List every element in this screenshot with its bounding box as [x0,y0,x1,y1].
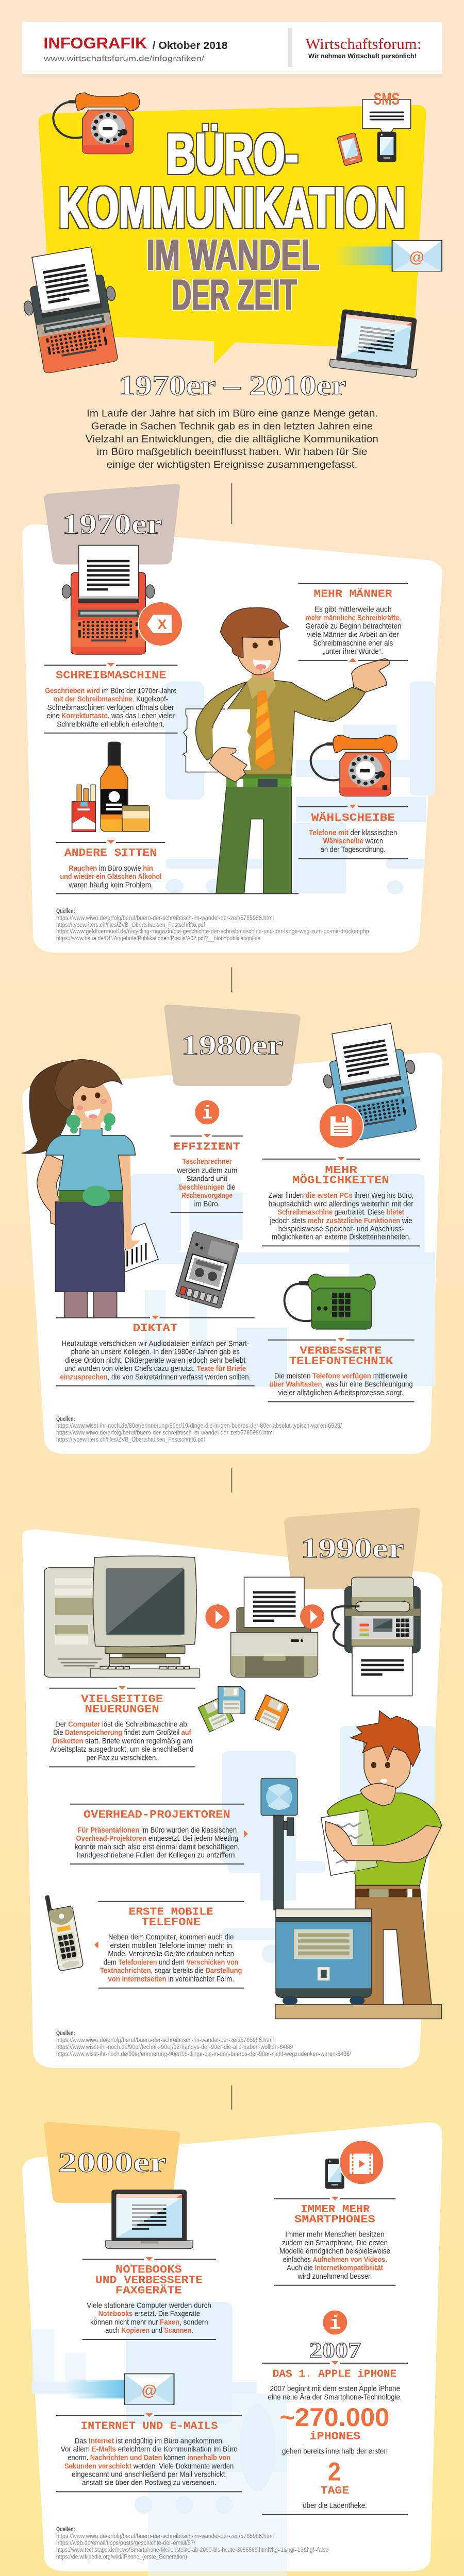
callout: mehr möglichkeiten: Schreibmaschine gearbeitet. Diese bietet [277,1209,404,1217]
tag: 1980er: 1980er [181,1029,283,1061]
icon: smartphone with video badge [325,2140,384,2189]
callout: apple iphone 2007: ~270.000 [279,2403,389,2432]
callout: effizient: im Büro. [194,1200,220,1209]
icon: fax machine [332,1577,420,1696]
callout: wählscheibe: Wählscheibe waren [323,837,383,845]
icon: email [67,2374,174,2404]
callout: mehr möglichkeiten: beispielsweise Speicher- und Anschluss- [278,1225,404,1233]
icon: info: i [202,1103,213,1124]
platform [275,2005,441,2019]
sources 1980er: https://typewriters.ch/files/ZVB_Obertshausen_Festschrift6.pdf [56,1437,205,1443]
callout: verbesserte telefontechnik: über Wahltasten, was für eine Beschleunigung [269,1381,413,1389]
callout: schreibmaschine: SCHREIBMASCHINE [56,670,167,682]
tag: 1970er: 1970er [62,508,162,540]
intro text: Vielzahl an Entwicklungen, die die alltägliche Kommunikation [86,434,378,445]
callout: internet und e-mails: Das Internet ist endgültig im Büro angekommen. [75,2437,224,2445]
callout: vielseitige neuerungen: Die Datenspeicherung findet zum Großteil auf [53,1728,191,1737]
callout: vielseitige neuerungen: VIELSEITIGE [81,1694,163,1705]
intro text [86,409,378,470]
callout: verbesserte telefontechnik: TELEFONTECHNIK [289,1356,393,1368]
callout: erste mobile telefone: dem Telefonieren und dem Verschicken von [104,1959,239,1967]
callout: wählscheibe: an der Tagesordnung. [321,846,386,854]
logo wordmark: Wirtschaftsforum: [305,36,421,53]
callout: overhead-projektoren: handgeschriebene Folien der Kollegen zu entziffern. [77,1852,237,1860]
sources 1990er: https://www.wisst-ihr-noch.de/90er/erinnerung-90er/16-dinge-die-in-den-bueros-der-90er-nicht-wegzudenken-waren-6436/ [56,2051,351,2057]
subtitle years: 1970er – 2010er [119,370,346,401]
callout: overhead-projektoren [70,1804,248,1864]
panel: 1980er [22,1005,442,1454]
intro text: Gerade in Sachen Technik gab es in den letzten Jahren eine [91,421,373,432]
sources 1970er [56,908,369,942]
callout: internet und e-mails: INTERNET UND E-MAILS [81,2420,218,2432]
sources 2000er: https://web.de/email/tipps/posts/geschichte-der-email/87/ [56,2540,196,2547]
callout: schreibmaschine: Geschrieben wird im Büro der 1970er-Jahre [45,687,177,695]
callout: notebooks [82,2257,216,2340]
character: man with papers [183,607,389,893]
callout: vielseitige neuerungen: NEUERUNGEN [85,1704,159,1716]
panel: 1990er [22,1507,442,2068]
intro text: Im Laufe der Jahre hat sich im Büro eine ganze Menge getan. [87,409,378,419]
callout: erste mobile telefone: ERSTE MOBILE [129,1907,213,1919]
callout: schreibmaschine: eine Korrekturtaste, was das Leben vieler [47,712,175,720]
callout: notebooks: Viele stationäre Computer werden durch [87,2301,211,2310]
callout: immer mehr smartphones: zudem ein Smartphone. Die ersten [282,2239,388,2247]
callout: overhead-projektoren: Overhead-Projektoren eingesetzt. Bei jedem Meeting [76,1835,238,1843]
sources 1980er [56,1416,342,1443]
sources 2000er: https://www.techstage.de/news/Smartphone-Meilensteine-ab-2000-bis-heute-3056569.html?hg=1&hgi=13&hgf=false [56,2547,328,2553]
hero title: DER ZEIT [172,270,297,319]
callout: effizient: Taschenrechner [183,1158,232,1166]
callout: mehr männer: viele Männer die Arbeit an der [307,631,399,639]
callout: apple iphone 2007: 2007 beginnt mit dem ersten Apple iPhone [270,2385,400,2393]
intro text: einige der wichtigsten Ereignisse zusammengefasst. [107,460,357,470]
callout: overhead-projektoren: konnte man sich also erst einmal damit beschäftigen, [75,1843,240,1851]
callout: internet und e-mails: Sekunden verschickt werden. Viele Dokumente werden [64,2462,234,2470]
icon: early mobile phone [45,1892,84,1971]
callout: vielseitige neuerungen: Disketten statt. Briefe werden regelmäßig am [53,1737,192,1745]
callout: effizient: EFFIZIENT [173,1141,240,1153]
callout: effizient: Standard und [187,1175,227,1183]
hero title [59,122,405,319]
callout: immer mehr smartphones: SMARTPHONES [294,2214,375,2226]
icon: overhead projector [261,1778,297,1910]
sources 1980er: https://www.wiwo.de/erfolg/beruf/buero-der-schreibtisch-im-wandel-der-zeit/5785986.html [56,1430,274,1436]
callout: mehr männer: „unter ihrer Würde“. [323,648,383,656]
sources 2000er: https://www.wiwo.de/erfolg/beruf/buero-der-schreibtisch-im-wandel-der-zeit/5785986.html [56,2533,274,2539]
sources 2000er [56,2527,328,2561]
callout: apple iphone 2007 [262,2339,408,2515]
callout: internet und e-mails: anstatt sie über den Postweg zu versenden. [82,2479,217,2487]
callout: diktat: Heutzutage verschicken wir Audiodateien einfach per Smart- [61,1340,250,1348]
icon: sms bubble [362,90,411,140]
icon: blue typewriter [316,1021,425,1144]
icon: bottle, cigarettes and glass [72,742,150,832]
arrow: computer to printer [205,1604,229,1629]
callout: immer mehr smartphones: Auch die Internetkompatibilität [287,2264,383,2273]
sources 1970er: https://www.wiwo.de/erfolg/beruf/buero-der-schreibtisch-im-wandel-der-zeit/5785986.html [56,915,274,921]
hero title: BÜRO- [167,122,299,186]
callout: internet und e-mails: Vor allem E-Mails erleichtern die Kommunikation im Büro [61,2446,238,2454]
sources 1990er: https://www.wisst-ihr-noch.de/90er/technik-90er/12-handys-der-90er-die-alle-haben-wollten-8468/ [56,2044,294,2050]
callout: effizient: beschleunigen die [179,1183,235,1192]
callout: mehr möglichkeiten: MEHR [325,1165,357,1177]
icon: red typewriter [62,545,155,654]
icon: rotary telephone [53,93,140,154]
callout: verbesserte telefontechnik: VERBESSERTE [300,1346,382,1358]
callout: internet und e-mails: eingescannt und anschließend per Mail verschickt, [72,2471,227,2479]
icon: correction key badge [138,602,183,646]
icon: info: i [329,2313,341,2334]
callout: andere sitten: waren häufig kein Problem. [68,881,153,889]
callout: overhead-projektoren: OVERHEAD-PROJEKTOREN [84,1809,230,1821]
callout: andere sitten [56,840,165,889]
icon: printer [231,1577,318,1677]
callout: erste mobile telefone: TELEFONE [141,1917,201,1929]
callout: diktat: einzusprechen, die von Sekretärinnen verfasst werden sollten. [60,1373,251,1381]
callout: andere sitten: Rauchen im Büro sowie hin [69,865,153,873]
header url: www.wirtschaftsforum.de/infografiken/ [43,55,205,63]
callout: immer mehr smartphones: Immer mehr Menschen besitzen [285,2231,385,2239]
callout: mehr männer: Schreibmaschine eher als [313,639,393,648]
callout: erste mobile telefone: ersten mobilen Telefone immer mehr in [110,1942,232,1950]
icon: projector cart [276,1909,371,2005]
icon: smartphones [337,132,396,166]
callout: schreibmaschine: Schreibkräfte erheblich erleichtert. [57,720,164,728]
icon: dictaphone [175,1231,239,1309]
callout: notebooks: FAXGERÄTE [115,2284,182,2297]
callout: apple iphone 2007: DAS 1. APPLE iPHONE [273,2368,396,2380]
callout: notebooks: NOTEBOOKS [115,2264,182,2276]
callout: apple iphone 2007: eine neue Ära der Smartphone-Technologie. [268,2393,402,2401]
callout: mehr möglichkeiten [262,1157,420,1246]
sources 1970er: Quellen: [56,908,75,914]
callout: mehr männer: MEHR MÄNNER [313,588,392,601]
icon: notebook [106,2190,193,2249]
callout: diktat: und wurden von vielen Chefs dazu genutzt, Texte für Briefe [64,1365,246,1373]
tag: 2000er [44,2122,180,2203]
tag: 2000er: 2000er [58,2146,166,2178]
hero title: IM WANDEL [146,231,320,279]
header date: / Oktober 2018 [153,40,228,52]
callout: verbesserte telefontechnik: Die meisten Telefone verfügen mittlerweile [274,1372,407,1381]
callout: immer mehr smartphones [274,2197,395,2285]
sources 1990er [56,2030,351,2057]
callout: mehr möglichkeiten: möglichkeiten an externe Diskettenheinheiten. [272,1233,411,1242]
tag: 1990er: 1990er [301,1533,404,1564]
callout: andere sitten: und wieder ein Gläschen Alkohol [60,873,162,881]
callout: mehr möglichkeiten: jedoch stets mehr zusätzliche Funktionen wie [270,1217,412,1225]
callout: apple iphone 2007: gehen bereits innerhalb der ersten [282,2448,388,2456]
sources 2000er: Quellen: [56,2527,75,2533]
callout: diktat [56,1316,255,1386]
callout: mehr möglichkeiten: hauptsächlich wird allerdings weiterhin mit der [269,1200,413,1209]
callout: overhead-projektoren: Für Präsentationen im Büro wurden die klassischen [77,1826,237,1835]
callout: wählscheibe: Telefone mit der klassischen [309,829,397,837]
callout: schreibmaschine: mit der Schreibmaschine. Kugelkopf- [53,696,168,704]
callout: notebooks: UND VERBESSERTE [95,2275,203,2286]
callout: apple iphone 2007: iPHONES [309,2431,360,2443]
callout: erste mobile telefone: Mode. Vereinzelte Geräte erlauben neben [108,1950,234,1958]
icon: floppy disks [198,1687,290,1732]
callout: schreibmaschine: Schreibmaschinen verfügen oftmals über [47,704,174,712]
callout: vielseitige neuerungen [49,1686,195,1767]
panel: 2000er [22,2122,442,2576]
sources 1990er: https://www.wiwo.de/erfolg/beruf/buero-der-schreibtisch-im-wandel-der-zeit/5785986.html [56,2038,274,2044]
icon: typewriter [15,244,127,375]
callout: immer mehr smartphones: IMMER MEHR [301,2204,370,2216]
callout: mehr männer: mehr männliche Schreibkräfte. [305,614,401,622]
icon: email: @ [409,249,424,266]
callout: verbesserte telefontechnik [268,1338,415,1402]
callout: mehr männer [299,584,408,662]
callout: schreibmaschine [44,663,177,733]
callout: effizient [171,1134,243,1213]
callout: apple iphone 2007: über die Ladentheke. [303,2502,367,2510]
callout: vielseitige neuerungen: Arbeitsplatz ausgedruckt, um sie anschließend [51,1745,193,1754]
tag: 1980er [164,1005,301,1086]
callout: diktat: diese Option nicht. Diktiergeräte waren jedoch sehr beliebt [65,1357,245,1365]
callout: wählscheibe [299,805,408,858]
callout: mehr möglichkeiten: MÖGLICHKEITEN [292,1175,389,1187]
callout: immer mehr smartphones: Modelle ermöglichen beispielsweise [279,2247,390,2256]
callout: andere sitten: ANDERE SITTEN [64,848,157,859]
callout: erste mobile telefone: Textnachrichten, sogar bereits die Darstellung [100,1967,242,1975]
hero speech bubble [39,105,426,364]
callout: notebooks: können nicht mehr nur Faxen, sondern [90,2318,208,2327]
sources 1970er: https://typewriters.ch/files/ZVB_Obertshausen_Festschrift6.pdf [56,922,205,928]
callout: internet und e-mails: enorm. Nachrichten und Daten können innerhalb von [68,2454,230,2462]
icon: info [195,1100,219,1124]
intro text: im Büro maßgeblich beeinflusst haben. Wir haben für Sie [97,447,367,457]
callout: erste mobile telefone: Neben dem Computer, kommen auch die [108,1934,234,1942]
tag: 1970er [44,484,180,565]
callout: vielseitige neuerungen: per Fax zu verschicken. [87,1754,158,1762]
sources 1980er: https://www.wisst-ihr-noch.de/80er/erinnerung-80er/19-dinge-die-in-den-bueros-der-80er-absolut-typisch-waren-6929/ [56,1423,342,1429]
icon: sms bubble: SMS [374,90,400,108]
icon: desktop computer [44,1556,200,1677]
icon: laptop [329,309,423,378]
character: woman with notes [22,1059,158,1318]
icon: push-button phone [285,1274,375,1329]
callout: apple iphone 2007: 2 [328,2458,341,2486]
callout: diktat: phone an unsere Kollegen. In den 1980er-Jahren gab es [71,1348,240,1356]
callout: apple iphone 2007: 2007 [309,2339,361,2363]
icon: info [323,2310,347,2335]
icon: email: @ [142,2382,157,2399]
header bar [22,22,442,78]
callout: verbesserte telefontechnik: vieler alltäglichen Arbeitsprozesse sorgt. [278,1389,404,1397]
icon: email [335,241,442,271]
sources 1970er: https://www.geldfuermuell.de/recycling-magazin/die-geschichte-der-schreibmaschine-und-der-lange-weg-zum-pc-mit-drucker.php [56,928,369,935]
callout: immer mehr smartphones: einfaches Aufnehmen von Videos. [283,2256,387,2264]
logo tagline: Wir nehmen Wirtschaft persönlich! [308,53,417,60]
callout: erste mobile telefone [98,1902,244,1988]
arrow: printer to fax [300,1604,324,1629]
sources 2000er: https://de.wikipedia.org/wiki/IPhone_(erste_Generation) [56,2554,187,2561]
callout: notebooks: Notebooks ersetzt. Die Faxgeräte [98,2310,200,2318]
tag: 1990er [284,1507,420,1589]
callout: effizient: werden zudem zum [176,1166,237,1175]
callout: vielseitige neuerungen: Der Computer löst die Schreibmaschine ab. [55,1720,189,1728]
sources 1990er: Quellen: [56,2030,75,2037]
sources 1970er: https://www.baua.de/DE/Angebote/Publikationen/Praxis/A62.pdf?__blob=publicationFile [56,936,260,942]
character: man with clipboard [321,1711,441,2005]
header title: INFOGRAFIK [43,34,147,52]
callout: apple iphone 2007: TAGE [321,2485,349,2497]
callout: diktat: DIKTAT [133,1323,177,1335]
callout: notebooks: auch Kopieren und Scannen. [105,2327,193,2335]
callout: immer mehr smartphones: wird zunehmend besser. [297,2273,372,2281]
callout: mehr möglichkeiten: Zwar finden die ersten PCs ihren Weg ins Büro, [269,1192,413,1200]
callout: mehr männer: Gerade zu Beginn betrachteten [305,622,401,631]
callout: mehr männer: Es gibt mittlerweile auch [314,605,392,614]
icon: floppy badge [319,1104,363,1148]
sources 1980er: Quellen: [56,1416,75,1422]
panel: 1970er [22,484,442,953]
callout: wählscheibe: WÄHLSCHEIBE [311,812,395,824]
icon: rotary phone [311,735,397,796]
callout: effizient: Rechenvorgänge [181,1192,233,1200]
callout: internet und e-mails [56,2413,242,2492]
callout: erste mobile telefone: von Internetseiten in vereinfachter Form. [108,1975,234,1984]
icon: correction key badge: X [157,617,167,632]
